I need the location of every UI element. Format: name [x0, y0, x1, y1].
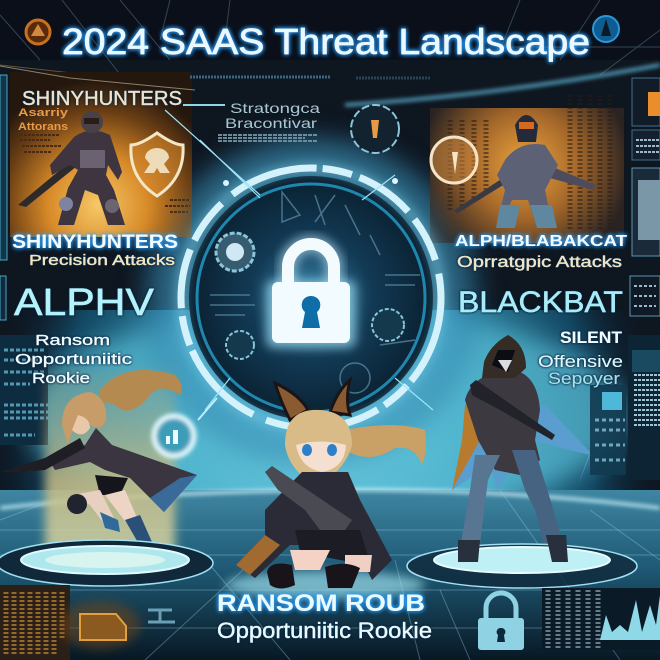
title: 2024 SAAS Threat Landscape	[62, 21, 590, 62]
small badge bottom	[226, 331, 254, 359]
icon: orange flame	[26, 20, 50, 44]
platform right	[407, 535, 637, 588]
label: silent offensive sepoyer: SILENT	[560, 328, 623, 347]
character: hooded soldier right	[453, 115, 596, 228]
small badge right	[372, 309, 404, 341]
hood	[482, 335, 526, 378]
right upper orange panel	[345, 65, 660, 243]
top decorative lines	[0, 0, 660, 100]
icon: target badge	[431, 137, 477, 183]
data panel bottom left	[0, 585, 175, 660]
torso	[465, 372, 540, 475]
label: small orange notes: Attorans	[18, 121, 68, 133]
left upper orange panel	[0, 66, 195, 260]
label: stratongca bracontivar	[225, 100, 320, 131]
hair	[100, 370, 182, 411]
label: ransom opportunistic rookie: Rookie	[32, 370, 90, 387]
legs	[95, 475, 128, 495]
label: silent offensive sepoyer	[538, 328, 623, 388]
panel divider lines upper middle	[183, 77, 430, 141]
ears	[275, 383, 308, 420]
label: alph blabakcat: ALPH/BLABAKCAT	[455, 233, 627, 250]
label: ransom opportunistic rookie: Opportuniitic	[15, 351, 133, 368]
central ring dial	[161, 110, 461, 448]
character: armored soldier left	[18, 111, 125, 225]
label: ransom roub: RANSOM ROUB	[217, 590, 425, 617]
label: ransom opportunistic rookie: Ransom	[35, 332, 110, 349]
floor grid	[0, 490, 660, 660]
small gear left	[216, 233, 254, 271]
cape	[452, 400, 590, 490]
label: ransom opportunistic rookie	[15, 332, 133, 387]
head	[285, 410, 352, 478]
rifle	[470, 380, 555, 440]
right edge data panels	[630, 78, 660, 316]
label: shinyhunters upper: SHINYHUNTERS	[22, 88, 182, 110]
coat	[236, 472, 392, 580]
label: opportunistic rookie: Opportuniitic Rookie	[217, 618, 432, 643]
icon: padlock bottom	[478, 593, 524, 650]
data chart bottom right	[542, 588, 660, 650]
icon: shield	[131, 133, 183, 196]
label: blackbat: BLACKBAT	[458, 286, 623, 319]
right data panel lower	[590, 335, 660, 480]
label: shinyhunters main: SHINYHUNTERS	[12, 232, 178, 253]
legs	[458, 455, 500, 560]
label: opragic attacks: Oprratgpic Attacks	[457, 254, 622, 271]
dial glyphs	[210, 192, 420, 393]
label: stratongca bracontivar: Bracontivar	[225, 115, 317, 131]
character: cat-ear girl	[225, 380, 426, 599]
label: silent offensive sepoyer: Offensive	[538, 352, 623, 371]
label: small orange notes	[18, 107, 69, 133]
label: precision attacks: Precision Attacks	[29, 252, 175, 269]
label: silent offensive sepoyer: Sepoyer	[548, 369, 620, 388]
hair stream	[345, 425, 426, 465]
icon: small circle badge	[154, 398, 217, 456]
left edge data panels	[0, 276, 48, 445]
rifle	[265, 466, 352, 530]
rifle	[0, 438, 85, 472]
icon: alert badge top	[351, 105, 399, 153]
character: hooded figure	[452, 335, 590, 562]
label: alphv: ALPHV	[14, 282, 155, 324]
coat	[50, 428, 197, 512]
character: ponytail girl	[0, 370, 197, 560]
icon: padlock	[266, 244, 356, 348]
skirt and legs	[295, 530, 368, 562]
label: small orange notes: Asarriy	[18, 107, 69, 119]
icon: blue badge	[593, 16, 619, 42]
platform left	[0, 540, 213, 586]
label: stratongca bracontivar: Stratongca	[230, 100, 320, 116]
